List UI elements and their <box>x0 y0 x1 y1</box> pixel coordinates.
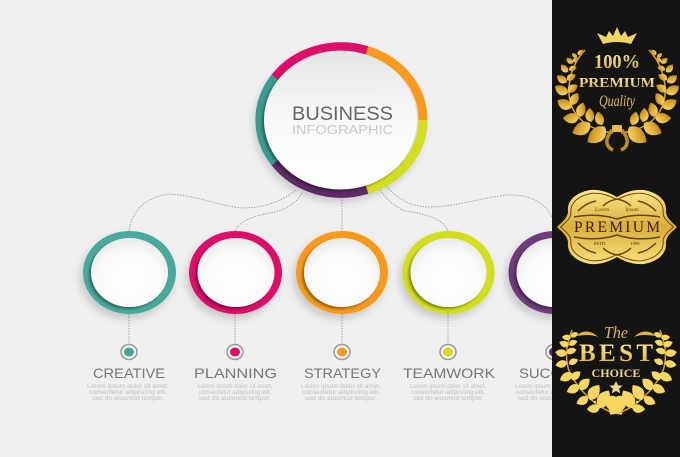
badge: 100% premium quality <box>553 27 680 150</box>
marker: creative <box>121 344 137 360</box>
step circle: planning <box>189 231 282 314</box>
label text: Lorem <box>594 207 609 213</box>
text block: creative: sed do eiusmod tempor. <box>92 396 164 402</box>
marker: planning <box>227 344 243 360</box>
text block: planning: Lorem ipsum dolor sit amet, <box>198 384 273 390</box>
label text: Ipsum <box>624 207 639 213</box>
badge text: The <box>604 323 628 342</box>
label text: ESTD. <box>594 241 606 246</box>
text block: planning: sed do eiusmod tempor. <box>199 396 271 402</box>
step circle: teamwork <box>402 231 494 314</box>
dotted connectors <box>129 187 554 343</box>
badge text <box>579 51 655 110</box>
step circle: strategy <box>296 231 388 314</box>
text block: creative: consectetur adipiscing elit, <box>89 390 167 396</box>
text block: success <box>515 365 591 402</box>
text block: strategy: sed do eiusmod tempor. <box>305 396 377 402</box>
text block: creative: Lorem ipsum dolor sit amet, <box>87 384 169 390</box>
title text: INFOGRAPHIC <box>292 123 393 137</box>
badge text: BEST <box>579 340 653 367</box>
title text <box>292 103 393 137</box>
badge text: CHOICE <box>592 368 641 380</box>
icon: crown <box>597 27 637 44</box>
step circle: creative <box>83 231 176 314</box>
label text: PREMIUM <box>574 219 660 236</box>
label text: 1990 <box>630 241 640 246</box>
main circle: business infographic <box>257 43 427 197</box>
text block: success: Lorem ipsum dolor sit amet, <box>515 384 591 390</box>
badge text: PREMIUM <box>579 76 655 91</box>
badge text: Quality <box>599 93 636 110</box>
text block: planning: PLANNING <box>194 365 277 381</box>
text block: strategy: Lorem ipsum dolor sit amet, <box>301 384 381 390</box>
text block: strategy: consectetur adipiscing elit, <box>302 390 380 396</box>
text block: teamwork: Lorem ipsum dolor sit amet, <box>410 384 486 390</box>
text block: teamwork <box>403 365 496 402</box>
text block: strategy <box>301 365 382 402</box>
marker: strategy <box>334 344 350 360</box>
badge: the best choice <box>555 323 677 419</box>
badge text <box>579 323 653 380</box>
text block: creative: CREATIVE <box>93 365 165 381</box>
flourish <box>576 332 598 337</box>
badge text: 100% <box>594 51 640 73</box>
text block: strategy: STRATEGY <box>304 365 382 381</box>
text block: teamwork: TEAMWORK <box>403 365 496 381</box>
text block: teamwork: consectetur adipiscing elit, <box>411 390 485 396</box>
text block: success: SUCCESS <box>519 365 591 381</box>
text block: success: sed do eiusmod tempor. <box>518 396 588 402</box>
text block: creative <box>87 365 169 402</box>
black side panel <box>552 0 680 457</box>
text block: success: consectetur adipiscing elit, <box>516 390 590 396</box>
badge: premium label <box>557 190 677 264</box>
text block: planning <box>194 365 277 402</box>
laurel wreath <box>553 48 680 150</box>
text block: planning: consectetur adipiscing elit, <box>198 390 272 396</box>
marker: success <box>546 344 562 360</box>
marker: teamwork <box>440 344 456 360</box>
laurel wreath <box>555 330 677 419</box>
label text <box>574 207 660 246</box>
icon: star <box>610 381 622 393</box>
title text: BUSINESS <box>292 103 393 125</box>
step circle: success <box>508 231 600 314</box>
ornaments <box>574 199 660 255</box>
text block: teamwork: sed do eiusmod tempor. <box>413 396 483 402</box>
